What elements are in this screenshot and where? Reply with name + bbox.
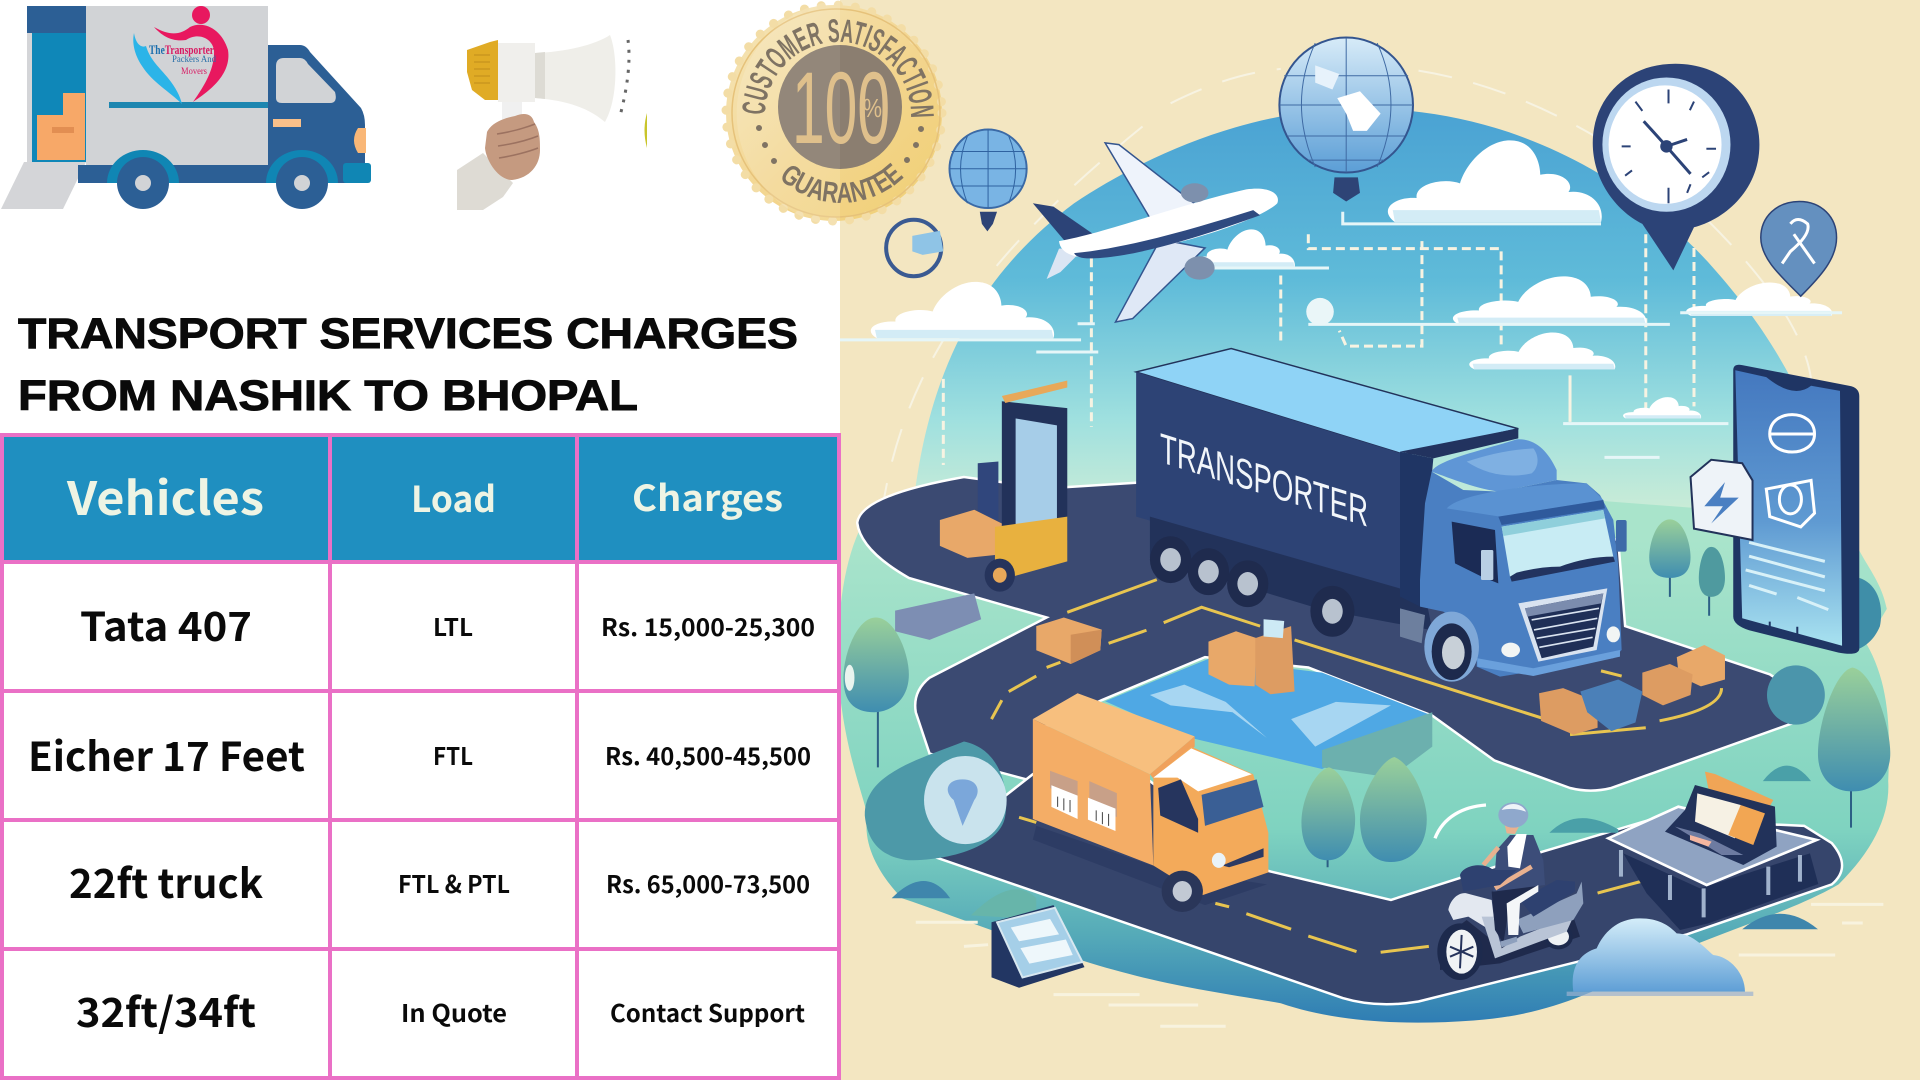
map panel [1105, 659, 1432, 778]
icon: balloon tree [865, 741, 1007, 860]
background: white left side [0, 0, 840, 1080]
row: 22ft truck: 22ft truck [69, 852, 263, 910]
cab [268, 45, 365, 183]
roads and scenery [843, 471, 1890, 1026]
headlights [1501, 643, 1520, 657]
row: 32ft/34ft: 32ft/34ft [76, 981, 256, 1039]
sleeve [457, 153, 513, 210]
cloud: lower right [1567, 918, 1753, 996]
row: 22ft truck: FTL & PTL [398, 865, 510, 900]
header row: Vehicles [66, 463, 264, 529]
small bulb at cloud base [1306, 298, 1334, 325]
row: Eicher 17 Feet: Rs. 40,500-45,500 [605, 737, 811, 772]
cab body [1420, 472, 1622, 677]
hand [485, 114, 540, 180]
icon: megaphone in hand [457, 35, 647, 210]
row: 22ft truck [69, 852, 810, 910]
ground blob [838, 485, 1889, 1023]
header row: Load [411, 471, 496, 523]
scooter rider [1435, 802, 1583, 980]
scooter, table and cloud foreground [1435, 772, 1818, 996]
icon: 100% satisfaction guarantee seal: % [863, 93, 882, 123]
illustration: transport network scene [838, 38, 1890, 1026]
delivery truck trailer [1136, 349, 1518, 637]
handle [502, 100, 522, 120]
cardboard boxes [1036, 618, 1725, 735]
logo: heart and hand: Movers [181, 66, 207, 76]
decorative white lines [916, 904, 1883, 1026]
table with laptop [1608, 772, 1818, 930]
row: Eicher 17 Feet [28, 725, 811, 783]
title: FROM NASHIK TO BHOPAL [18, 372, 638, 420]
table body background [2, 562, 839, 1078]
table grid lines [2, 435, 839, 1078]
icon: ring badge [886, 220, 943, 276]
cargo box [86, 6, 268, 165]
row: 32ft/34ft: Contact Support [610, 994, 805, 1029]
bumper [1477, 650, 1620, 676]
chassis [78, 165, 268, 183]
row: Tata 407: LTL [433, 608, 473, 643]
row: 32ft/34ft: In Quote [401, 994, 507, 1029]
front wheel [1424, 612, 1479, 682]
road: upper loop [857, 471, 1807, 791]
dashed route lines [881, 69, 1811, 517]
icon: delivery van logo [1, 6, 371, 209]
title [18, 310, 798, 420]
forklift [940, 381, 1067, 592]
icon: large globe balloon [1279, 38, 1413, 201]
row: 22ft truck: Rs. 65,000-73,500 [606, 865, 810, 900]
icon: clock pin [1593, 64, 1759, 270]
ramp [1, 162, 86, 209]
trailer wheels [1150, 517, 1432, 637]
icon: 100% satisfaction guarantee seal: 100 [792, 51, 890, 165]
icon: airplane [1033, 143, 1278, 322]
truck cab [1400, 428, 1627, 682]
parcel [37, 93, 85, 160]
icon: small globe balloon [950, 129, 1027, 231]
icon: keypad device [992, 905, 1084, 988]
row: Eicher 17 Feet: Eicher 17 Feet [28, 725, 305, 783]
road: lower loop [930, 774, 1842, 1004]
icon: 100% satisfaction guarantee seal [722, 0, 946, 226]
clouds [840, 140, 1842, 457]
trees [843, 519, 1890, 929]
logo: heart and hand: Packers And [172, 54, 216, 64]
background: beige right side [840, 0, 1920, 1080]
header row: Charges [632, 470, 783, 522]
logo: heart and hand: TheTransporter [149, 42, 214, 57]
icon: ribbon pin [1761, 201, 1837, 296]
yellow back [467, 40, 498, 100]
mirrors [1616, 520, 1627, 552]
body [498, 43, 535, 102]
truck lettering: TRANSPORTER [1160, 425, 1368, 537]
trailer top [1136, 349, 1518, 455]
side window [1452, 522, 1498, 583]
table header background [2, 434, 839, 562]
trailer side [1136, 372, 1422, 599]
title: TRANSPORT SERVICES CHARGES [18, 310, 798, 358]
wheels [107, 150, 338, 209]
windshield [1502, 510, 1613, 577]
table: vehicle load and charges [2, 434, 839, 1078]
horn [535, 35, 615, 122]
row: Tata 407 [80, 595, 815, 653]
roof fairing [1432, 439, 1557, 492]
van rear door [27, 33, 34, 162]
icon: 100% satisfaction guarantee seal: GUARANTEE [782, 162, 904, 203]
yellow sliver [644, 113, 647, 148]
row: Eicher 17 Feet: FTL [433, 737, 473, 772]
grille [1518, 588, 1607, 662]
icon: stone wall [895, 593, 981, 640]
row: 32ft/34ft [76, 981, 805, 1039]
row: Tata 407: Tata 407 [80, 595, 252, 653]
header row [66, 463, 783, 529]
row: Tata 407: Rs. 15,000-25,300 [601, 608, 815, 643]
orange delivery van [1033, 693, 1268, 912]
icon: 100% satisfaction guarantee seal: CUSTOMER SATISFACTION [742, 19, 934, 117]
sound dots [620, 40, 629, 116]
icon: document tag [1691, 460, 1753, 540]
sky dome [909, 108, 1852, 565]
smartphone [1733, 365, 1859, 654]
logo: heart and hand [133, 6, 228, 104]
road markings [992, 580, 1722, 952]
cab roof panel [1447, 483, 1603, 517]
